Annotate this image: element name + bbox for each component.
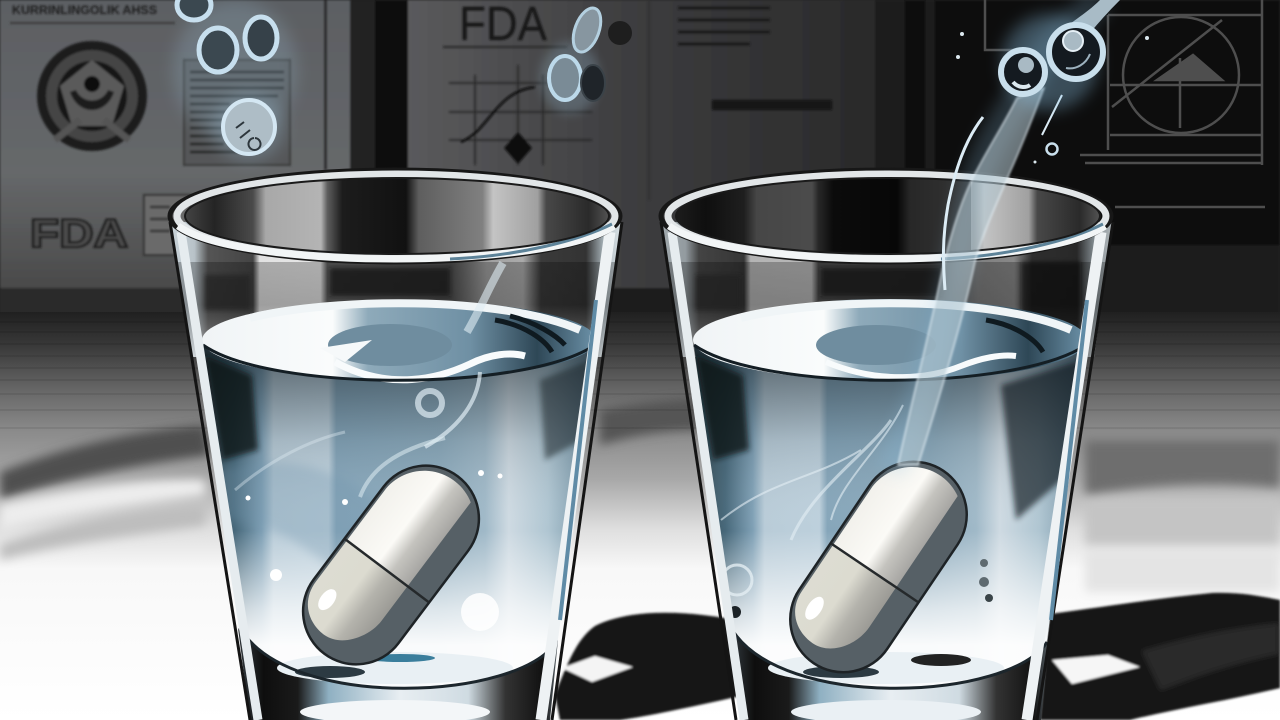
- water body: [694, 347, 1077, 644]
- glass base: [729, 628, 1049, 720]
- stream ribbon: [898, 88, 1044, 465]
- molecule glow: [1002, 14, 1098, 110]
- FDA logo: FDA: [30, 212, 128, 256]
- molecule small: [1001, 50, 1045, 94]
- glass walls: [170, 222, 622, 720]
- glass neck above the water: [661, 222, 1113, 357]
- glass neck above the water: [170, 222, 622, 357]
- glass rim: [170, 170, 620, 262]
- water surface: [693, 299, 1087, 381]
- small ring: [1046, 144, 1058, 154]
- bubbles: [722, 559, 993, 618]
- glass 2: [661, 170, 1113, 720]
- glass walls: [661, 222, 1113, 720]
- water surface: [202, 300, 596, 380]
- glowing molecules, centre: [540, 4, 632, 114]
- glass rim: [661, 170, 1111, 262]
- cast shadows on table: [555, 593, 1280, 720]
- emblem: [37, 41, 147, 151]
- glowing molecules, left: [173, 0, 297, 161]
- capsule: [770, 441, 987, 693]
- bubbles: [246, 470, 502, 631]
- table surface with light streaks: [0, 312, 1280, 720]
- glass 1: [170, 170, 622, 720]
- molecule large: [1049, 25, 1103, 79]
- medicine swirl: [235, 263, 503, 497]
- left poster: heading, emblem, document and FDA logo: [10, 5, 290, 256]
- stream glow: [890, 0, 1100, 470]
- rising stream and molecules, right: [890, 0, 1149, 470]
- poster heading: KURRINLINGOLIK AHSS: [12, 5, 157, 17]
- capsule: [282, 444, 500, 686]
- background wall: [0, 0, 1280, 320]
- water body: [204, 347, 588, 641]
- swirls in water: [721, 405, 903, 540]
- right poster: blueprint diagram: [985, 0, 1265, 207]
- document: [184, 60, 290, 165]
- glass base: [238, 628, 558, 720]
- centre poster: FDA logo and chart: [443, 0, 832, 200]
